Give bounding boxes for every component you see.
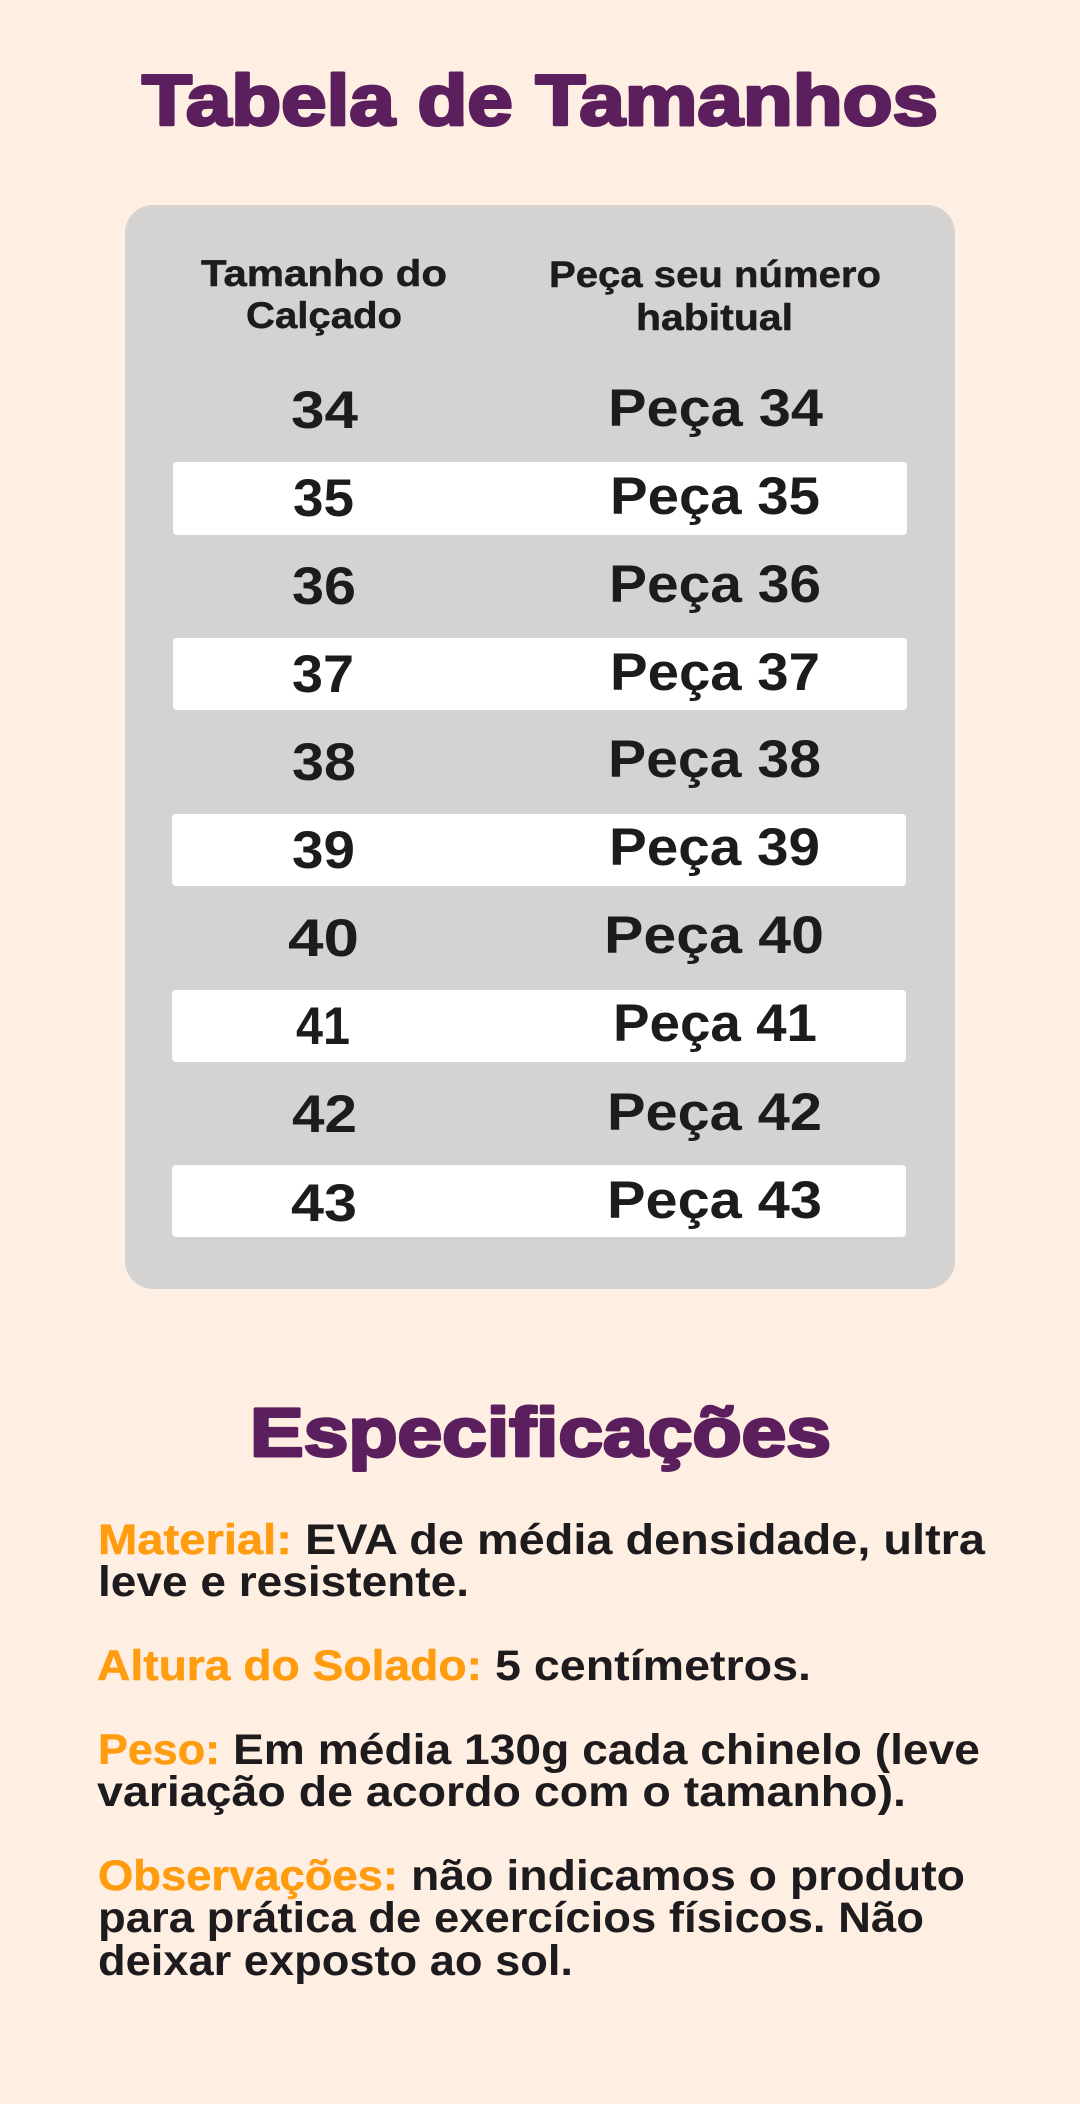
column header: shoe size: Calçado	[246, 295, 402, 336]
heading: specifications: Especificações	[250, 1394, 831, 1471]
row 36: Peça 36	[609, 555, 821, 614]
spec: material: Material:	[98, 1516, 292, 1564]
spec: sole height	[97, 1642, 811, 1690]
row 43	[172, 1165, 906, 1237]
spec: sole height: 5 centímetros.	[495, 1642, 811, 1690]
spec: material: leve e resistente.	[98, 1558, 469, 1606]
row 36	[292, 555, 821, 616]
row 39	[172, 814, 906, 886]
column header: order your size: habitual	[636, 297, 793, 338]
row 41	[172, 990, 906, 1062]
row 34	[291, 379, 824, 440]
spec: notes: deixar exposto ao sol.	[98, 1937, 573, 1985]
row 36: 36	[292, 557, 356, 616]
spec: weight	[97, 1726, 980, 1816]
row 38: Peça 38	[608, 730, 821, 789]
row 43: Peça 43	[607, 1171, 822, 1230]
spec: notes: não indicamos o produto	[411, 1852, 965, 1900]
column header: order your size	[549, 254, 881, 338]
row 42: Peça 42	[607, 1083, 822, 1142]
row 37	[173, 638, 907, 710]
spec: material: EVA de média densidade, ultra	[305, 1516, 986, 1564]
column header: shoe size	[201, 253, 447, 336]
spec: sole height: Altura do Solado:	[97, 1642, 482, 1690]
row 40: Peça 40	[604, 906, 824, 965]
row 38: 38	[292, 733, 356, 792]
row 35: Peça 35	[610, 467, 820, 526]
spec: material	[98, 1516, 986, 1606]
spec: weight: Peso:	[98, 1726, 220, 1774]
panel: size table	[125, 205, 955, 1289]
row 42	[292, 1083, 822, 1144]
row 39: Peça 39	[609, 818, 820, 877]
row 43: 43	[291, 1174, 357, 1233]
row 38	[292, 730, 821, 792]
spec: notes: Observações:	[98, 1852, 398, 1900]
row 41: 41	[296, 997, 350, 1056]
spec: notes	[98, 1852, 965, 1985]
column header: order your size: Peça seu número	[549, 254, 881, 295]
row 41: Peça 41	[613, 994, 817, 1053]
title: Tabela de Tamanhos	[142, 62, 938, 141]
row 39: 39	[292, 821, 355, 880]
row 34: Peça 34	[608, 379, 824, 438]
row 35	[173, 462, 907, 535]
column header: shoe size: Tamanho do	[201, 253, 447, 294]
row 42: 42	[292, 1085, 357, 1144]
row 35: 35	[293, 469, 354, 528]
row 40	[288, 906, 824, 968]
row 37: 37	[292, 645, 354, 704]
spec: weight: variação de acordo com o tamanho).	[97, 1768, 906, 1816]
row 40: 40	[288, 909, 359, 968]
row 34: 34	[291, 381, 359, 440]
spec: weight: Em média 130g cada chinelo (leve	[233, 1726, 980, 1774]
row 37: Peça 37	[610, 643, 820, 702]
spec: notes: para prática de exercícios físicos. Não	[98, 1894, 924, 1942]
